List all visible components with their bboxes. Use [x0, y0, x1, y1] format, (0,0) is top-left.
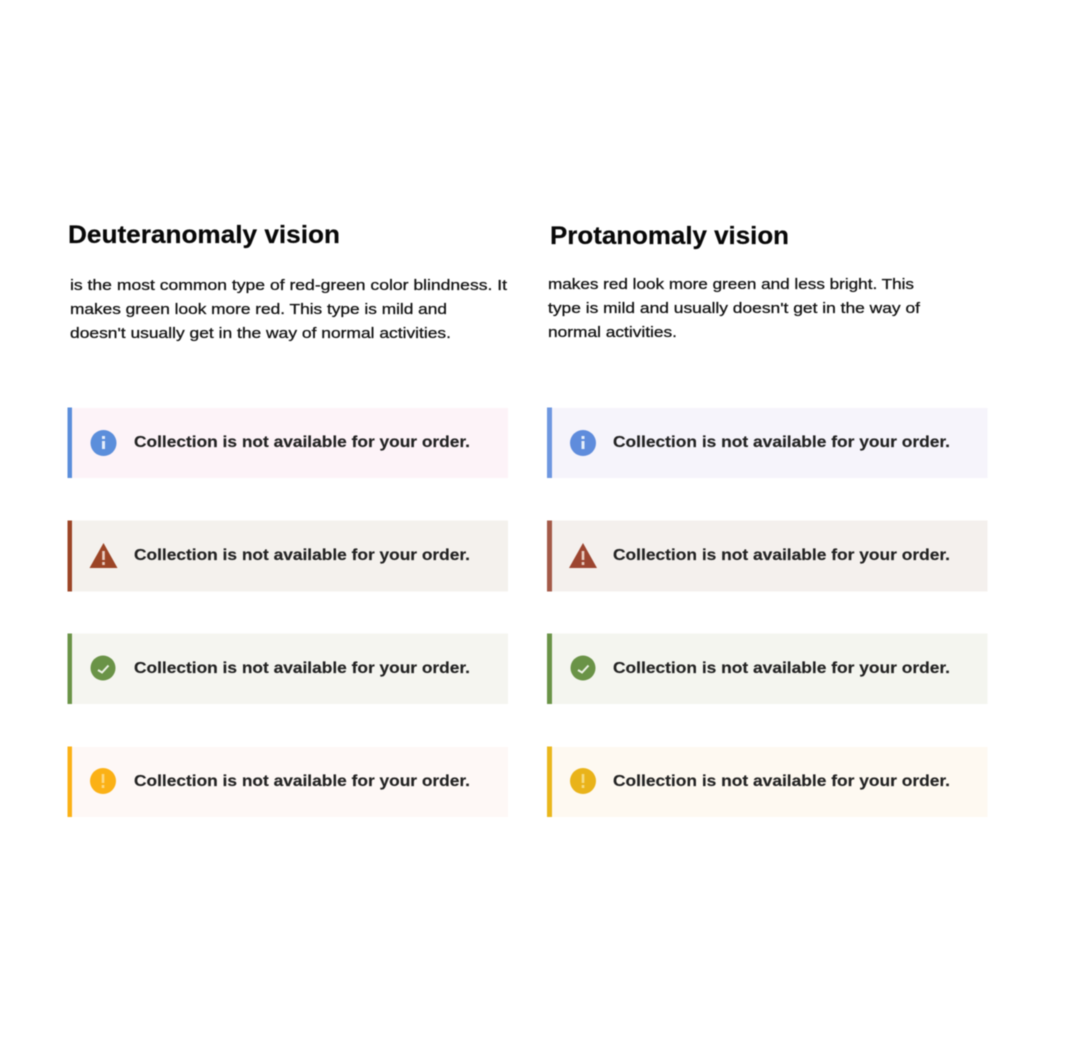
alert: success: [68, 634, 508, 704]
alert: success: Collection is not available for your order.: [134, 660, 470, 677]
alert: info: [547, 408, 988, 478]
icon: info: [570, 430, 596, 456]
alert: error: Collection is not available for your order.: [134, 547, 470, 564]
alert: error: [547, 520, 988, 592]
icon: check: [90, 656, 116, 680]
alert: notice: [547, 746, 988, 817]
alert: success: Collection is not available for your order.: [613, 660, 950, 677]
icon: exclamation: [90, 768, 116, 794]
alert: info: Collection is not available for your order.: [613, 434, 950, 451]
heading: protanomaly: Protanomaly vision: [550, 222, 789, 250]
icon: exclamation: [570, 768, 596, 794]
icon: warning triangle: [90, 543, 118, 568]
text block: protanomaly description: type is mild and usually doesn't get in the way of: [548, 301, 921, 317]
icon: check: [570, 656, 596, 680]
text block: protanomaly description: normal activities.: [548, 325, 677, 341]
text block: deuteranomaly description: is the most common type of red-green color blindness. It: [70, 278, 507, 294]
alert: notice: Collection is not available for your order.: [613, 773, 950, 790]
text block: deuteranomaly description: [70, 278, 507, 342]
alert: info: [68, 408, 508, 478]
text block: deuteranomaly description: doesn't usually get in the way of normal activities.: [70, 326, 451, 342]
icon: warning triangle: [569, 543, 597, 568]
alert: info: Collection is not available for your order.: [134, 434, 470, 451]
alert: notice: Collection is not available for your order.: [134, 773, 470, 790]
heading: deuteranomaly: Deuteranomaly vision: [68, 221, 340, 249]
alert: success: [547, 634, 988, 704]
alert: error: [68, 520, 508, 592]
alert: error: Collection is not available for your order.: [613, 547, 950, 564]
panel: deuteranomaly column: [68, 221, 508, 817]
text block: protanomaly description: makes red look more green and less bright. This: [548, 277, 914, 293]
text block: deuteranomaly description: makes green look more red. This type is mild and: [70, 302, 447, 318]
alert: notice: [68, 746, 508, 817]
panel: protanomaly column: [547, 222, 988, 817]
text block: protanomaly description: [548, 277, 921, 341]
icon: info: [90, 430, 116, 456]
